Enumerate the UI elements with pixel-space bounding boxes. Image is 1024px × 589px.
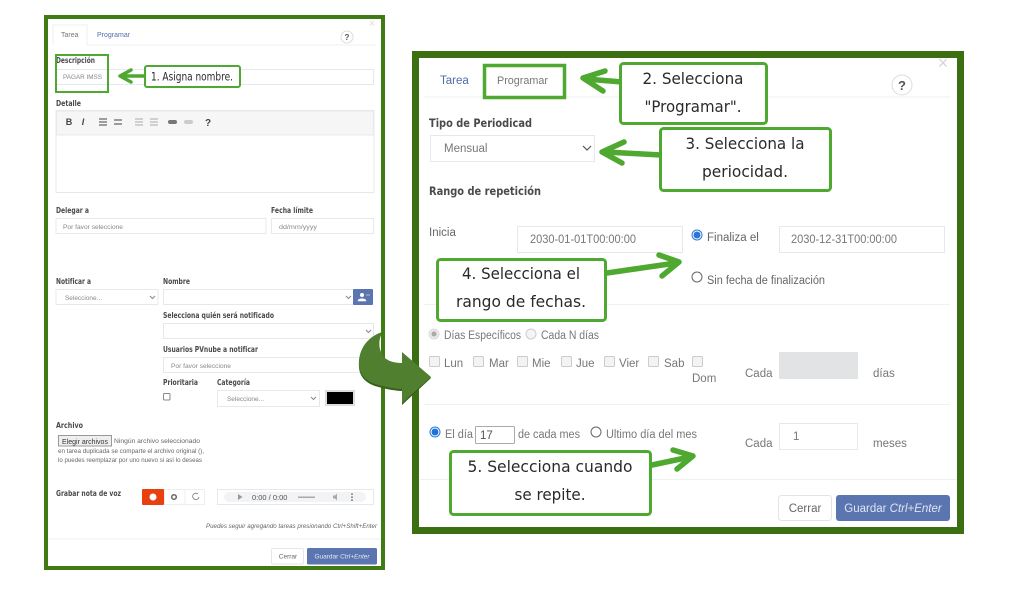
period type select: Tipo de Periodicad: [429, 116, 532, 130]
notified person select: Selecciona quién será notificado: [163, 310, 274, 320]
audio player: [218, 490, 374, 504]
description field: [56, 55, 374, 92]
tabs: Tarea and Programar: Programar: [97, 32, 131, 39]
description field: Descripción: [56, 55, 95, 65]
every N days field: días: [873, 368, 895, 380]
delegate field: Delegar a: [56, 206, 89, 215]
button: Cerrar: [778, 496, 832, 520]
end date option: 2030-12-31T00:00:00: [791, 234, 897, 246]
callout: step 3: [660, 128, 830, 190]
file attachment: en tarea duplicada se comparte el archivo original (),: [58, 448, 204, 455]
day mode options: [429, 329, 599, 342]
PVnube users field: Usuarios PVnube a notificar: [163, 345, 258, 354]
day of month option: 17: [480, 430, 493, 442]
panel: task form (Tarea tab): [46, 17, 383, 568]
callout: step 4: 4. Selecciona el: [462, 264, 580, 283]
category select and colour swatch: Seleccione...: [227, 396, 264, 403]
every N days field: Cada: [745, 368, 773, 380]
file attachment: Ningún archivo seleccionado: [114, 438, 200, 445]
detail editor: I: [82, 117, 85, 127]
due date field: [271, 206, 374, 234]
detail editor: ?: [205, 118, 211, 129]
every N months field: 1: [793, 431, 799, 443]
tabs: Tarea and Programar: Tarea: [440, 75, 469, 87]
weekday checkboxes: Sab: [664, 358, 684, 370]
icon: help: [341, 31, 353, 43]
period type select: [429, 116, 594, 162]
shortcut hint: Puedes seguir agregando tareas presionando Ctrl+Shift+Enter: [206, 523, 378, 530]
day mode options: Días Específicos: [444, 330, 521, 342]
arrow: transition between panels: [359, 332, 431, 405]
button: Cerrar: [272, 548, 304, 564]
notify select: Notificar a: [56, 277, 91, 286]
detail editor: B: [66, 117, 73, 127]
callout: step 1: 1. Asigna nombre.: [151, 70, 233, 84]
callout: step 5: 5. Selecciona cuando: [468, 457, 632, 476]
category select and colour swatch: Categoría: [217, 378, 250, 387]
delegate field: [56, 206, 266, 234]
last day of month option: Ultimo día del mes: [606, 429, 697, 441]
callout: step 2: [620, 64, 766, 124]
end date option: Finaliza el: [707, 232, 759, 244]
start date field: [429, 226, 682, 252]
callout: step 1: [145, 66, 240, 87]
category select and colour swatch: [217, 378, 354, 406]
day of month option: [430, 426, 580, 444]
file attachment: Elegir archivos: [62, 439, 108, 446]
repetition range heading: Rango de repetición: [429, 184, 541, 198]
period type select: Mensual: [444, 143, 487, 155]
detail editor: Detalle: [56, 99, 81, 108]
icon: close: ×: [369, 18, 375, 30]
weekday checkboxes: Jue: [576, 358, 595, 370]
button: Cerrar: Cerrar: [789, 503, 821, 515]
weekday checkboxes: Lun: [444, 358, 463, 370]
every N months field: [420, 424, 957, 480]
name select: Nombre: [163, 277, 190, 286]
callout: step 5: se repite.: [514, 485, 586, 504]
no end date option: [424, 272, 950, 304]
due date field: dd/mm/yyyy: [279, 224, 318, 231]
tabs: Tarea and Programar: Tarea: [61, 32, 79, 39]
delegate field: Por favor seleccione: [63, 224, 123, 231]
callout: step 4: rango de fechas.: [456, 292, 586, 311]
PVnube users field: [163, 345, 374, 372]
callout: step 5: [450, 452, 650, 514]
every N months field: Cada: [745, 438, 773, 450]
button: Guardar: [307, 548, 377, 564]
name select: [163, 277, 373, 305]
arrow: step 1: [120, 70, 146, 82]
arrow: step 4: [607, 255, 679, 276]
weekday checkboxes: [430, 356, 716, 385]
callout: step 2: 2. Selecciona: [642, 69, 744, 88]
file attachment: lo puedes reemplazar por uno nuevo si así lo deseas: [58, 457, 203, 464]
arrow: step 5: [652, 450, 693, 469]
weekday checkboxes: Mar: [489, 358, 509, 370]
description field: PAGAR IMSS: [63, 74, 102, 81]
panel: schedule form (Programar tab): [416, 53, 960, 530]
icon: help: ?: [898, 78, 906, 93]
notified person select: [163, 310, 374, 338]
every N months field: meses: [873, 438, 907, 450]
weekday checkboxes: Dom: [692, 373, 716, 385]
tabs: Tarea and Programar: [53, 25, 376, 45]
start date field: 2030-01-01T00:00:00: [530, 234, 636, 246]
notify select: Seleccione...: [65, 295, 102, 302]
day of month option: de cada mes: [518, 429, 580, 441]
button: Guardar: Guardar Ctrl+Enter: [314, 554, 370, 560]
detail editor: [56, 99, 374, 192]
tabs: Tarea and Programar: Programar: [497, 75, 548, 87]
button: Guardar: [836, 495, 950, 521]
voice note recorder: Grabar nota de voz: [56, 489, 121, 498]
icon: help: ?: [345, 33, 350, 42]
button: Guardar: Guardar Ctrl+Enter: [844, 503, 943, 515]
due date field: Fecha límite: [271, 206, 313, 215]
weekday checkboxes: Vier: [619, 358, 639, 370]
button: Cerrar: Cerrar: [279, 554, 298, 560]
audio player: 0:00 / 0:00: [252, 493, 287, 502]
callout: step 4: [438, 260, 606, 320]
weekday checkboxes: Mie: [532, 358, 551, 370]
notify select: [56, 277, 158, 304]
arrow: step 2: [583, 71, 622, 91]
no end date option: Sin fecha de finalización: [707, 275, 825, 287]
every N days field: [424, 352, 950, 404]
arrow: step 3: [602, 142, 661, 163]
icon: close: ×: [938, 53, 948, 73]
callout: step 2: "Programar".: [644, 97, 742, 116]
file attachment: Archivo: [56, 421, 83, 430]
PVnube users field: Por favor seleccione: [171, 363, 231, 370]
day mode options: Cada N días: [541, 330, 599, 342]
start date field: Inicia: [429, 227, 456, 239]
callout: step 3: 3. Selecciona la: [686, 134, 804, 153]
tabs: Tarea and Programar: [424, 66, 950, 98]
icon: help: [892, 75, 912, 95]
voice note recorder: [56, 489, 204, 505]
callout: step 3: periocidad.: [702, 162, 788, 181]
priority checkbox: Prioritaria: [163, 378, 198, 387]
end date option: [692, 226, 944, 252]
priority checkbox: [163, 378, 198, 400]
day of month option: El día: [445, 429, 474, 441]
file attachment: [56, 421, 204, 464]
